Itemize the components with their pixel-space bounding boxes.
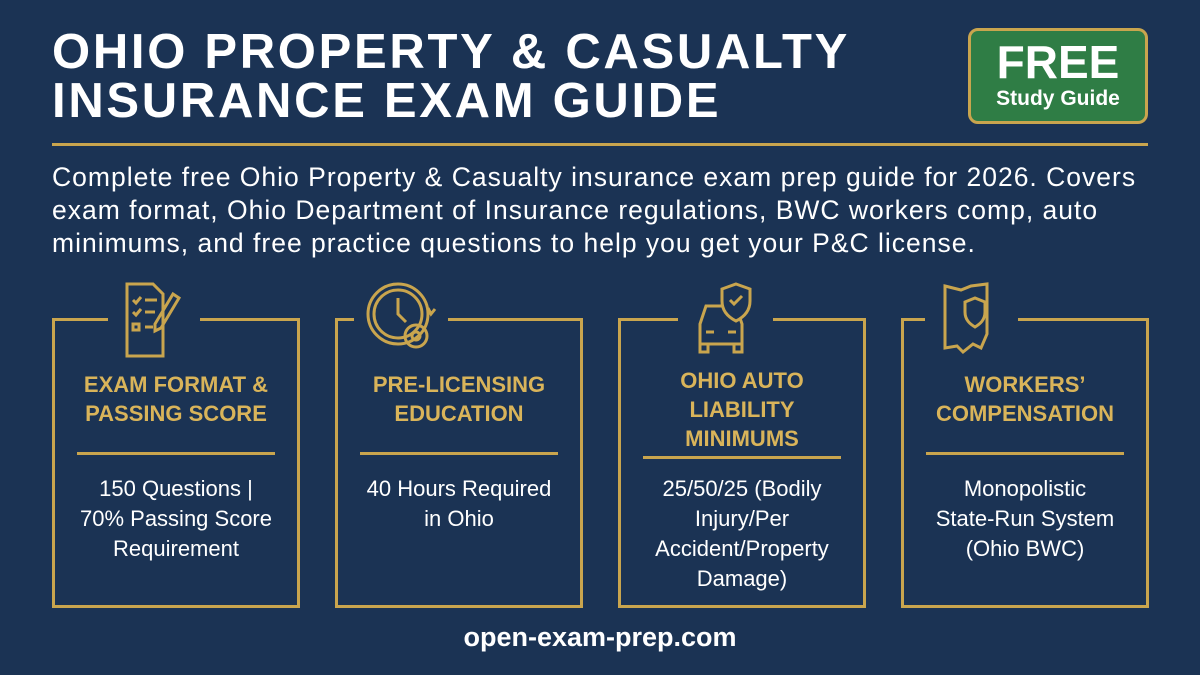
icon: car shield (698, 282, 752, 354)
icon: checklist (126, 282, 181, 358)
body text: in Ohio (424, 506, 494, 531)
body text: (Ohio BWC) (966, 536, 1084, 561)
footer url: open-exam-prep.com (463, 622, 737, 652)
body text: Injury/Per (695, 506, 789, 531)
title: OHIO PROPERTY & CASUALTY (52, 25, 850, 79)
heading (84, 372, 268, 426)
body text: Requirement (113, 536, 239, 561)
heading (373, 372, 545, 426)
heading: PASSING SCORE (85, 401, 267, 426)
panel: pre-licensing (335, 318, 583, 608)
body text: Accident/Property (655, 536, 829, 561)
description text: minimums, and free practice questions to help you get your P&C license. (52, 228, 976, 258)
panel: auto liability (618, 318, 866, 608)
heading: MINIMUMS (685, 426, 799, 451)
heading (936, 372, 1114, 426)
description text (52, 162, 1136, 258)
body text: 40 Hours Required (367, 476, 551, 501)
heading: EXAM FORMAT & (84, 372, 268, 397)
badge: free study guide (968, 28, 1148, 124)
body text (936, 476, 1114, 561)
heading: COMPENSATION (936, 401, 1114, 426)
badge: free study guide: Study Guide (996, 87, 1120, 110)
body text (80, 476, 272, 561)
title (52, 25, 850, 128)
heading: OHIO AUTO (680, 368, 804, 393)
body text: 25/50/25 (Bodily (662, 476, 822, 501)
body text: Monopolistic (964, 476, 1086, 501)
heading: PRE-LICENSING (373, 372, 545, 397)
badge: free study guide: FREE (997, 36, 1119, 88)
title: INSURANCE EXAM GUIDE (52, 74, 721, 128)
icon: clock gear (366, 282, 436, 348)
heading (680, 368, 804, 451)
panel: exam format (52, 318, 300, 608)
body text: 70% Passing Score (80, 506, 272, 531)
body text (367, 476, 551, 531)
body text: 150 Questions | (99, 476, 253, 501)
heading: EDUCATION (394, 401, 524, 426)
panel: workers comp (901, 318, 1149, 608)
description text: exam format, Ohio Department of Insurance regulations, BWC workers comp, auto (52, 195, 1098, 225)
heading: WORKERS’ (964, 372, 1086, 397)
body text: State-Run System (936, 506, 1114, 531)
description text: Complete free Ohio Property & Casualty insurance exam prep guide for 2026. Covers (52, 162, 1136, 192)
icon: ohio shield (944, 282, 988, 354)
heading: LIABILITY (689, 397, 795, 422)
body text (655, 476, 829, 591)
body text: Damage) (697, 566, 787, 591)
